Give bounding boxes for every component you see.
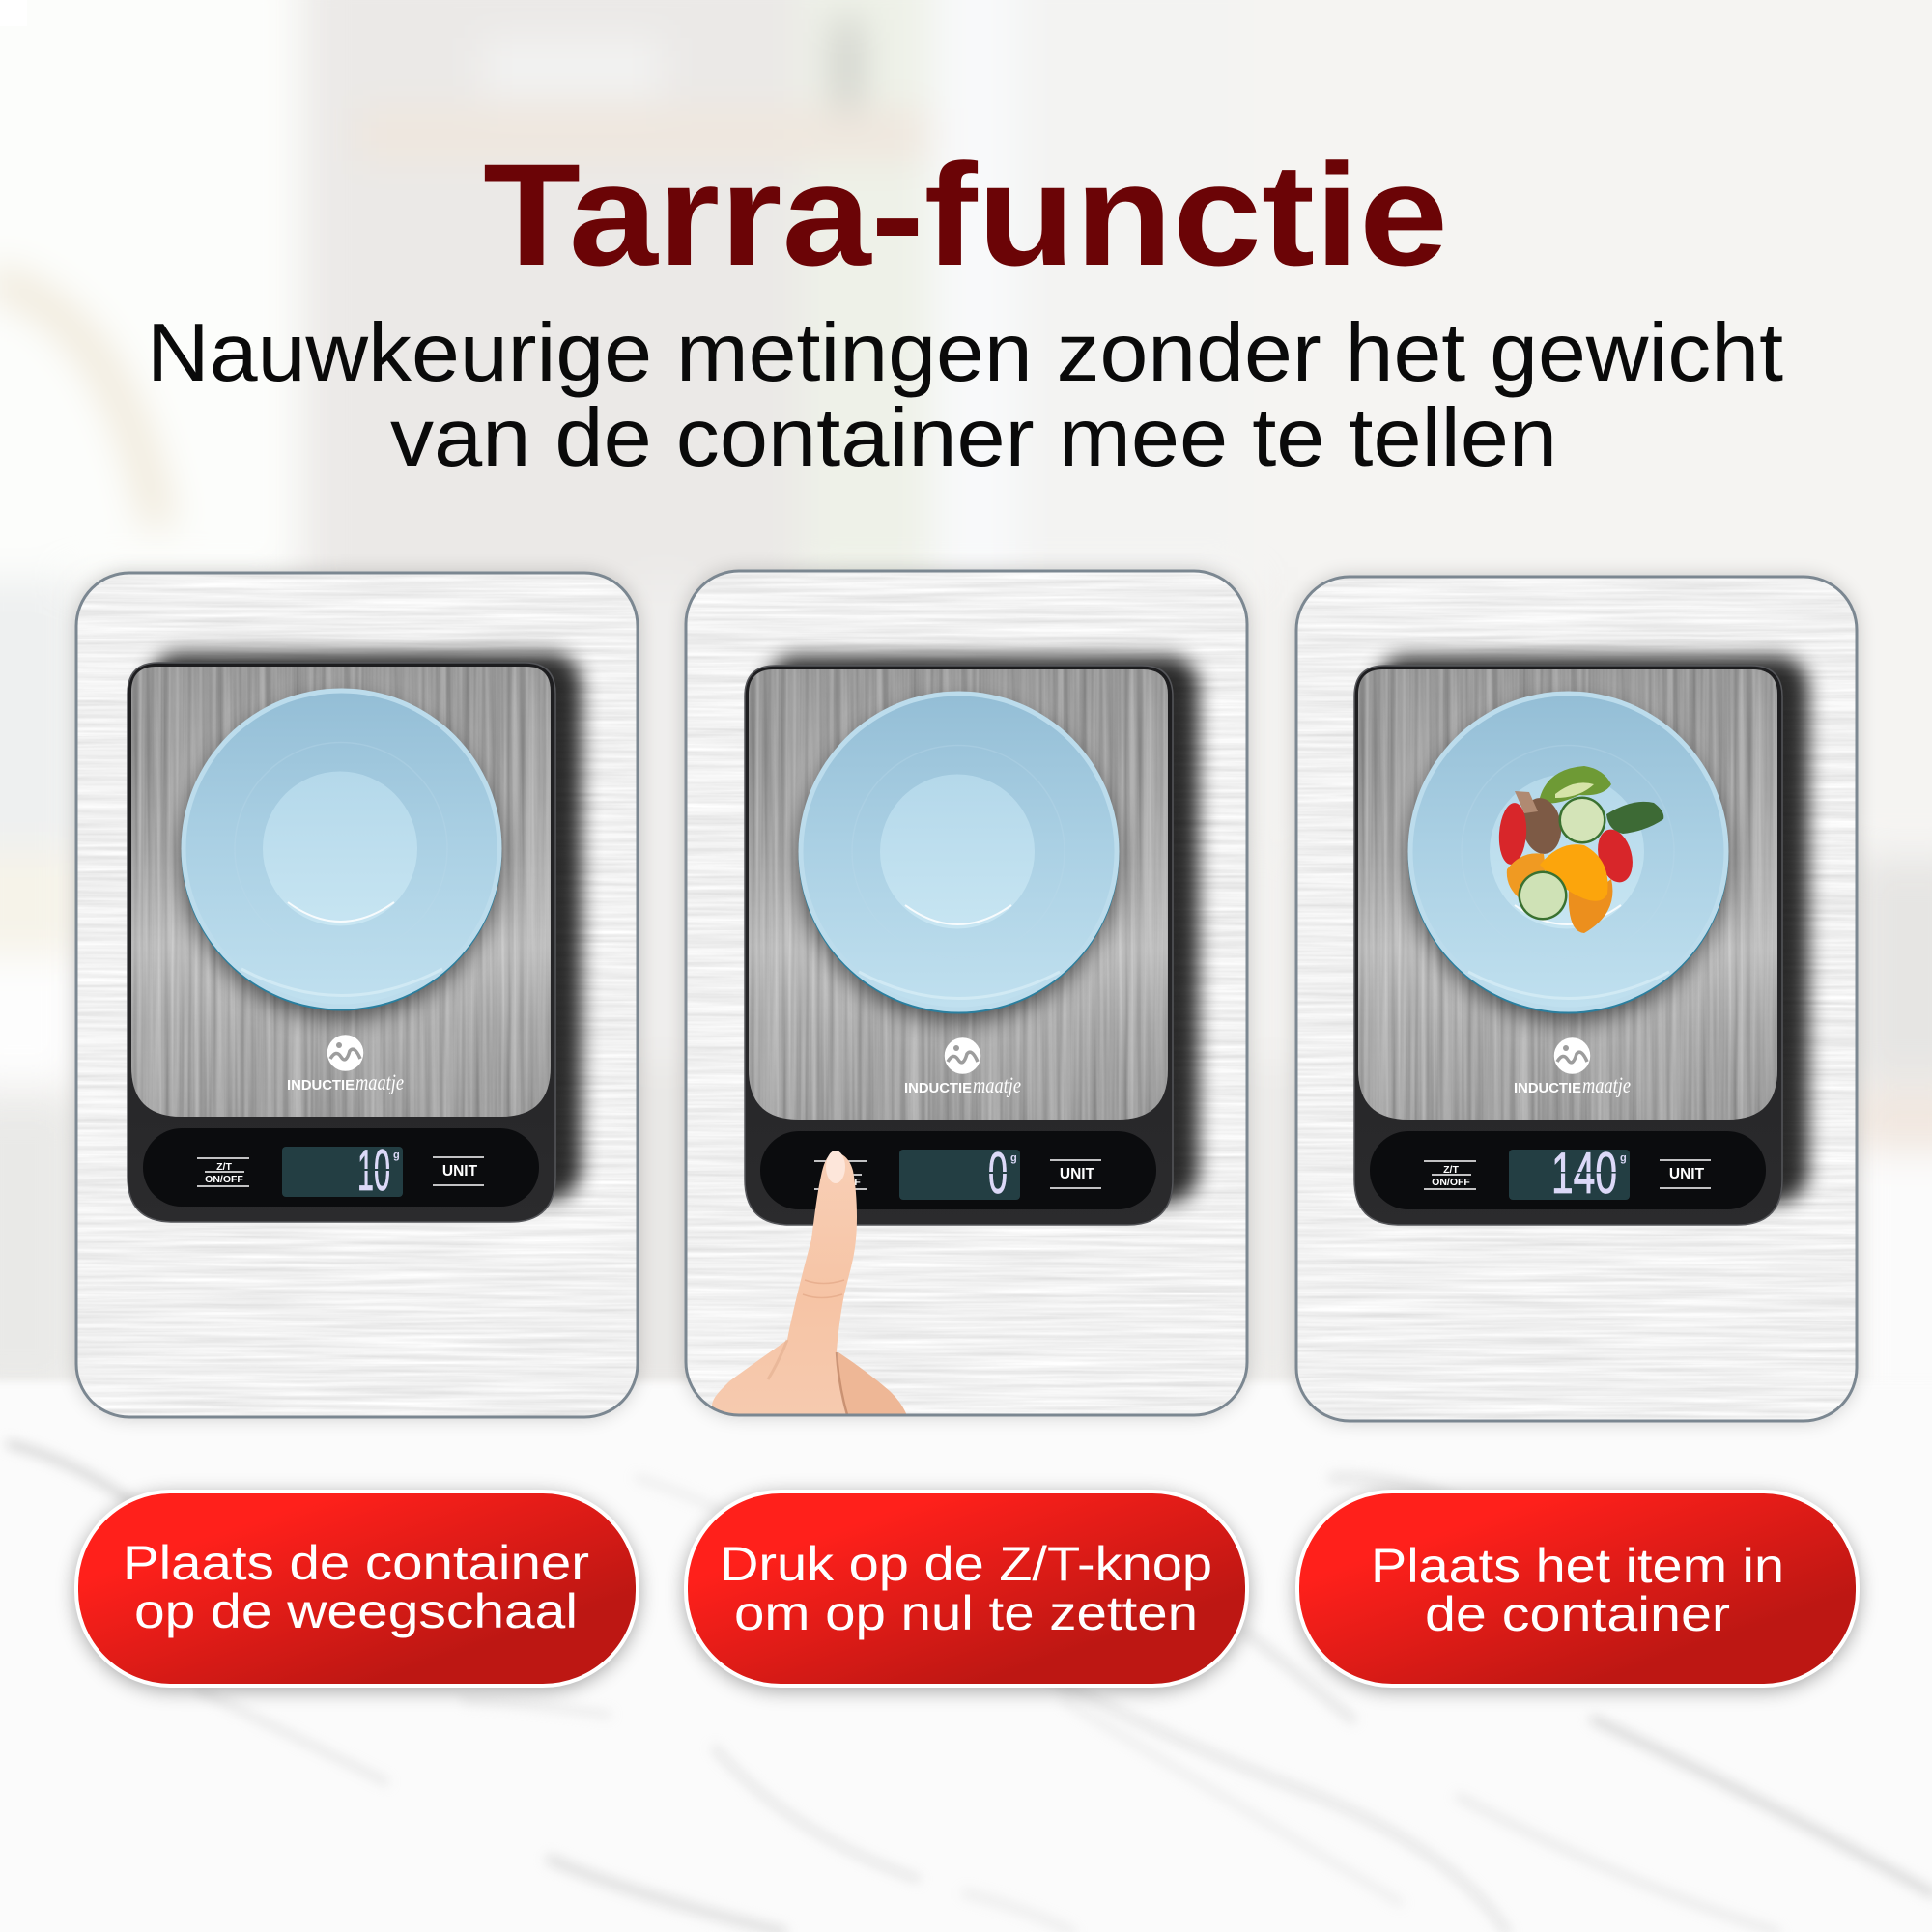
Z/T button label (814, 1161, 867, 1189)
logo: maatje (973, 1073, 1021, 1097)
bowl (1408, 692, 1729, 1014)
UNIT button label: UNIT (442, 1163, 478, 1179)
Z/T button label: Z/T (216, 1161, 232, 1173)
step 3 label pill (1296, 1492, 1859, 1690)
step 2 label pill: Druk op de Z/T-knop (720, 1537, 1212, 1591)
panel: step 3, item in the container (1296, 577, 1857, 1421)
display reading: g (1010, 1152, 1017, 1164)
display reading: 140 (1551, 1141, 1617, 1206)
bowl (182, 688, 502, 1010)
logo (904, 1038, 1021, 1097)
UNIT button label: UNIT (1060, 1166, 1095, 1182)
logo: maatje (355, 1070, 404, 1094)
control strip (143, 1128, 539, 1207)
logo: INDUCTIE (904, 1081, 972, 1096)
UNIT button label: UNIT (1669, 1166, 1705, 1182)
Z/T button label: ON/OFF (822, 1177, 861, 1188)
scale with empty bowl (128, 653, 582, 1222)
control strip (1370, 1131, 1766, 1209)
UNIT button label (1050, 1160, 1101, 1188)
logo: INDUCTIE (1514, 1081, 1581, 1096)
UNIT button label (433, 1157, 484, 1185)
scale with filled bowl (1354, 656, 1808, 1225)
step 1 label pill: op de weegschaal (134, 1584, 578, 1638)
logo: INDUCTIE (287, 1078, 355, 1094)
step 1 label pill: Plaats de container (123, 1536, 589, 1590)
bowl (798, 692, 1119, 1014)
UNIT button label (1660, 1160, 1711, 1188)
step 3 label pill: de container (1425, 1587, 1730, 1641)
subtitle: van de container mee te tellen (390, 392, 1557, 484)
Z/T button label: ON/OFF (1432, 1177, 1470, 1188)
display reading (355, 1138, 400, 1203)
panel: step 1, container on the scale (76, 573, 638, 1417)
panel: step 2, press the button (686, 571, 1247, 1418)
display reading: 0 (988, 1141, 1008, 1206)
display reading: g (1620, 1152, 1627, 1164)
logo (287, 1036, 404, 1094)
step 1 label pill (75, 1492, 639, 1690)
scale with empty bowl (745, 656, 1199, 1225)
fruit and vegetables on the plate (1497, 766, 1663, 933)
title: Tarra-functie (483, 133, 1448, 296)
step 2 label pill (685, 1492, 1248, 1690)
control strip (760, 1131, 1156, 1209)
logo (1514, 1038, 1631, 1097)
display reading: 10 (357, 1138, 390, 1203)
Z/T button label (197, 1158, 249, 1186)
hand pressing the button (712, 1151, 908, 1418)
Z/T button label: ON/OFF (205, 1174, 243, 1185)
subtitle (147, 307, 1783, 484)
subtitle: Nauwkeurige metingen zonder het gewicht (147, 307, 1783, 399)
display reading: g (393, 1150, 400, 1161)
step 2 label pill: om op nul te zetten (734, 1586, 1198, 1640)
Z/T button label (1424, 1161, 1476, 1189)
step 3 label pill: Plaats het item in (1371, 1539, 1784, 1593)
Z/T button label: Z/T (1443, 1164, 1459, 1176)
logo: maatje (1582, 1073, 1631, 1097)
